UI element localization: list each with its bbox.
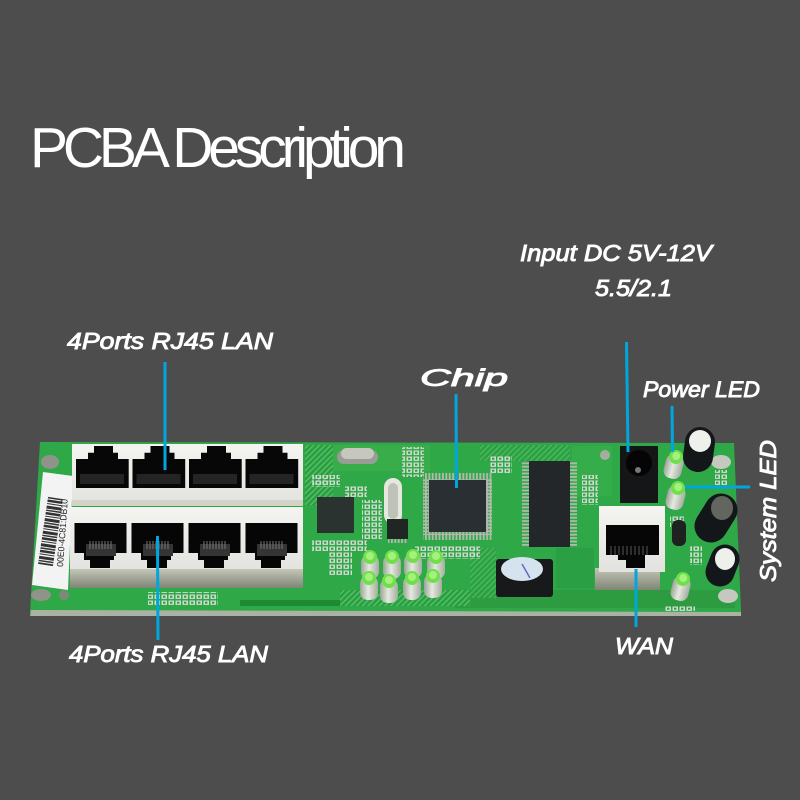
label: jack size: 5.5/2.1 bbox=[595, 275, 672, 301]
panel: circuit board photo bbox=[30, 430, 741, 616]
arrow: DC input leader bbox=[626, 342, 628, 452]
transformer bbox=[496, 557, 553, 597]
arrow: WAN leader bbox=[634, 569, 638, 627]
bottom RJ45 ports bbox=[70, 507, 303, 588]
crystal oscillators bbox=[337, 448, 402, 524]
LED cluster bbox=[360, 549, 445, 603]
capacitors bbox=[672, 430, 735, 572]
DC power jack bbox=[620, 446, 658, 503]
label: system LED: System LED bbox=[755, 440, 781, 582]
label: WAN: WAN bbox=[615, 633, 673, 659]
memory chip bbox=[522, 461, 577, 547]
status LEDs bbox=[662, 448, 693, 603]
title: PCBA Description bbox=[30, 116, 406, 180]
label: power LED: Power LED bbox=[643, 377, 760, 402]
SMD components bbox=[148, 447, 727, 612]
arrow: system LED leader bbox=[685, 486, 750, 488]
top RJ45 ports bbox=[72, 444, 303, 506]
arrow: top LAN leader bbox=[164, 362, 166, 470]
arrow: chip leader bbox=[454, 394, 458, 488]
arrow: power LED leader bbox=[670, 406, 674, 452]
label: bottom LAN: 4Ports RJ45 LAN bbox=[69, 641, 268, 667]
board substrate bbox=[30, 442, 741, 616]
main chip bbox=[423, 473, 492, 540]
mounting holes bbox=[41, 455, 59, 469]
arrow: bottom LAN leader bbox=[156, 536, 160, 640]
WAN RJ45 port bbox=[595, 506, 665, 590]
barcode sticker bbox=[32, 472, 73, 590]
label: DC input: Input DC 5V-12V bbox=[520, 240, 715, 266]
barcode sticker: 00E0-4C81:DB10 bbox=[55, 499, 70, 567]
label: chip: Chip bbox=[420, 365, 508, 392]
small ICs bbox=[317, 497, 408, 543]
label: top LAN: 4Ports RJ45 LAN bbox=[67, 328, 273, 354]
